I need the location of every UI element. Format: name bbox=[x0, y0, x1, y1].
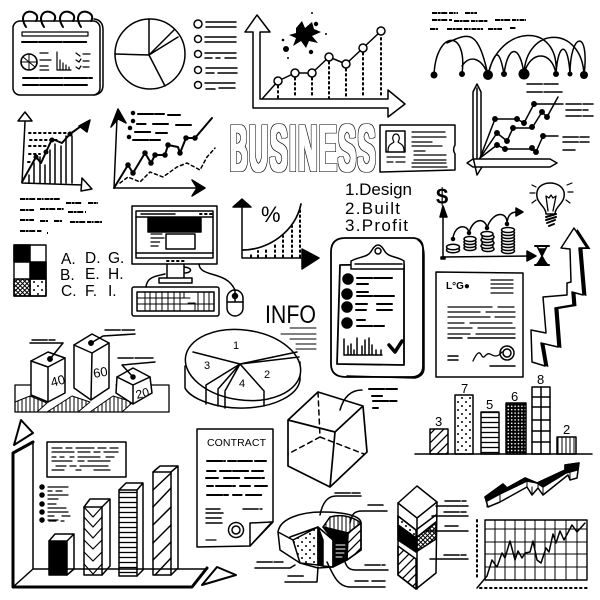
chart: area with triangle arrows bbox=[18, 112, 92, 191]
chart: three lines with sword arrows bbox=[467, 84, 593, 175]
coin stacks bbox=[446, 228, 514, 254]
letter legend: D. bbox=[85, 250, 100, 267]
icon: clipboard with checklist bbox=[331, 238, 424, 378]
box 20: 20 bbox=[134, 385, 151, 402]
info text lines bbox=[281, 328, 316, 349]
icon: hourglass bbox=[535, 246, 549, 265]
chart: two trend lines bbox=[111, 109, 215, 196]
chart: coins growth: $ bbox=[436, 184, 448, 209]
label: INFO: INFO bbox=[265, 301, 316, 329]
bar: diagonal stripes bbox=[153, 466, 178, 575]
icon: computer bbox=[132, 206, 243, 316]
icon: ink splat bbox=[282, 12, 327, 59]
icon: rising 3D arrow bbox=[531, 228, 590, 367]
chart: 3D pie with labels bbox=[255, 493, 388, 587]
panel: big 3D bar chart bbox=[13, 420, 236, 587]
chart: stock line grid bbox=[477, 520, 590, 588]
numbered list: 1.Design bbox=[345, 180, 412, 199]
document: logo page bbox=[436, 272, 523, 377]
chart: 3D pie with numbers: 2 bbox=[264, 369, 270, 381]
bar: black bbox=[49, 534, 74, 575]
notebook rings bbox=[23, 12, 92, 27]
numbered list bbox=[345, 180, 412, 235]
chart: percent curve bbox=[233, 199, 319, 269]
box 20 bbox=[116, 362, 155, 404]
chart: bars with numbers: 7 bbox=[461, 381, 468, 396]
chart: 3D pie with numbers: 1 bbox=[233, 340, 239, 352]
document: contract: CONTRACT bbox=[207, 437, 267, 449]
icon: spiral notebook bbox=[13, 12, 103, 95]
chart: layered column with labels bbox=[398, 486, 468, 589]
pie leader lines bbox=[255, 496, 388, 587]
icon: checker key bbox=[14, 245, 46, 296]
chart: bars with numbers: 5 bbox=[486, 397, 493, 412]
chart: coins growth bbox=[436, 184, 536, 261]
box 40 bbox=[30, 343, 67, 402]
icon: zigzag 3D arrow bbox=[485, 463, 579, 507]
icon: ID card bbox=[380, 125, 455, 172]
letter legend: E. bbox=[85, 266, 100, 283]
chart: bars with numbers bbox=[415, 372, 592, 454]
box 60: 60 bbox=[92, 364, 109, 381]
text scribble: left paragraph bbox=[20, 199, 102, 233]
cube outline bbox=[288, 389, 397, 487]
chart: pie bbox=[115, 19, 185, 89]
chart: 3D pie with numbers bbox=[181, 322, 305, 408]
numbered list: 3.Profit bbox=[345, 216, 408, 235]
numbered list: 2.Built bbox=[345, 199, 400, 218]
box 40: 40 bbox=[49, 372, 67, 390]
chart: 3D pie with numbers: 4 bbox=[239, 378, 245, 390]
letter legend: B. bbox=[60, 267, 75, 284]
bar: chevrons bbox=[84, 499, 110, 575]
letter legend: H. bbox=[108, 266, 124, 283]
chart: percent curve: % bbox=[261, 202, 281, 227]
icon: light bulb bbox=[530, 183, 573, 226]
letter legend: C. bbox=[61, 283, 76, 300]
title: BUSINESS: BUSINESS bbox=[230, 114, 377, 184]
list with bullets bbox=[194, 20, 237, 89]
bullet list bbox=[40, 485, 70, 522]
letter legend: I. bbox=[108, 283, 117, 300]
chart: bars with numbers: 2 bbox=[563, 422, 570, 437]
letter legend: A. bbox=[61, 251, 76, 268]
chart: 3D boxes on floor bbox=[15, 330, 169, 412]
bar: horizontal stripes bbox=[119, 483, 143, 576]
chart: rising line with large arrows bbox=[245, 15, 405, 117]
box 60 bbox=[74, 334, 135, 400]
diagram: connected arcs bbox=[430, 35, 588, 80]
chart: bars with numbers: 3 bbox=[435, 414, 442, 429]
triangle arrows bbox=[14, 420, 236, 585]
note box bbox=[47, 442, 126, 477]
chart: bars with numbers: 6 bbox=[511, 389, 518, 404]
letter legend: G. bbox=[108, 250, 124, 267]
document: contract bbox=[197, 429, 273, 547]
chart: bars with numbers: 8 bbox=[537, 372, 544, 387]
chart: 3D pie with numbers: 3 bbox=[204, 360, 210, 372]
letter legend: F. bbox=[85, 283, 97, 300]
text scribble: top right bbox=[430, 13, 526, 29]
document: logo page: L°G● bbox=[446, 281, 470, 292]
letter legend bbox=[60, 250, 124, 300]
pie body bbox=[278, 512, 361, 568]
